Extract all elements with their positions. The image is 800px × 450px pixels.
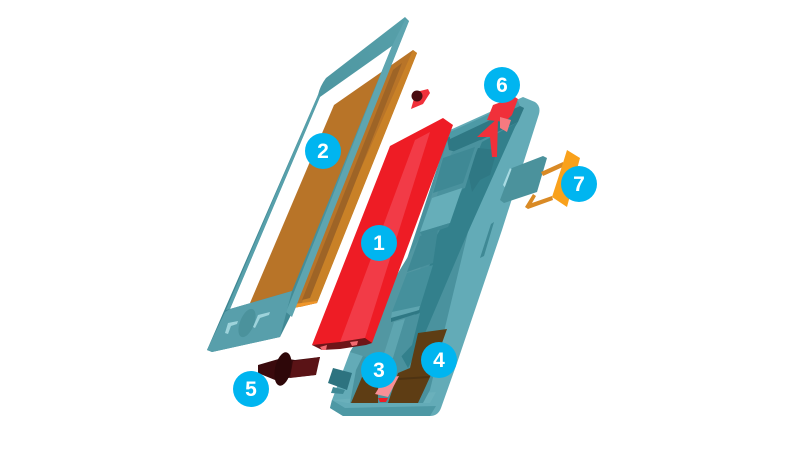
label 6 [484, 67, 520, 103]
orange plate [250, 50, 417, 308]
label 3 [361, 352, 397, 388]
label 3: 3 [373, 359, 385, 382]
label 5: 5 [245, 378, 257, 401]
front frame [207, 17, 409, 352]
label 6: 6 [496, 74, 508, 97]
SIM tray [500, 156, 547, 203]
label 2: 2 [317, 140, 329, 163]
label 5 [233, 371, 269, 407]
label 4: 4 [433, 349, 445, 372]
label 4 [421, 342, 457, 378]
brown cells [351, 329, 447, 403]
label 7: 7 [573, 173, 585, 196]
dark red part [258, 351, 320, 387]
label 1 [361, 225, 397, 261]
label 2 [305, 133, 341, 169]
side buttons [328, 368, 352, 394]
orange SIM ring [525, 150, 580, 209]
label 7 [561, 166, 597, 202]
back case [330, 97, 540, 416]
red connector [477, 97, 518, 157]
red battery [312, 118, 453, 350]
label 1: 1 [373, 232, 385, 255]
small red part [411, 89, 430, 109]
pink connector [375, 376, 399, 402]
